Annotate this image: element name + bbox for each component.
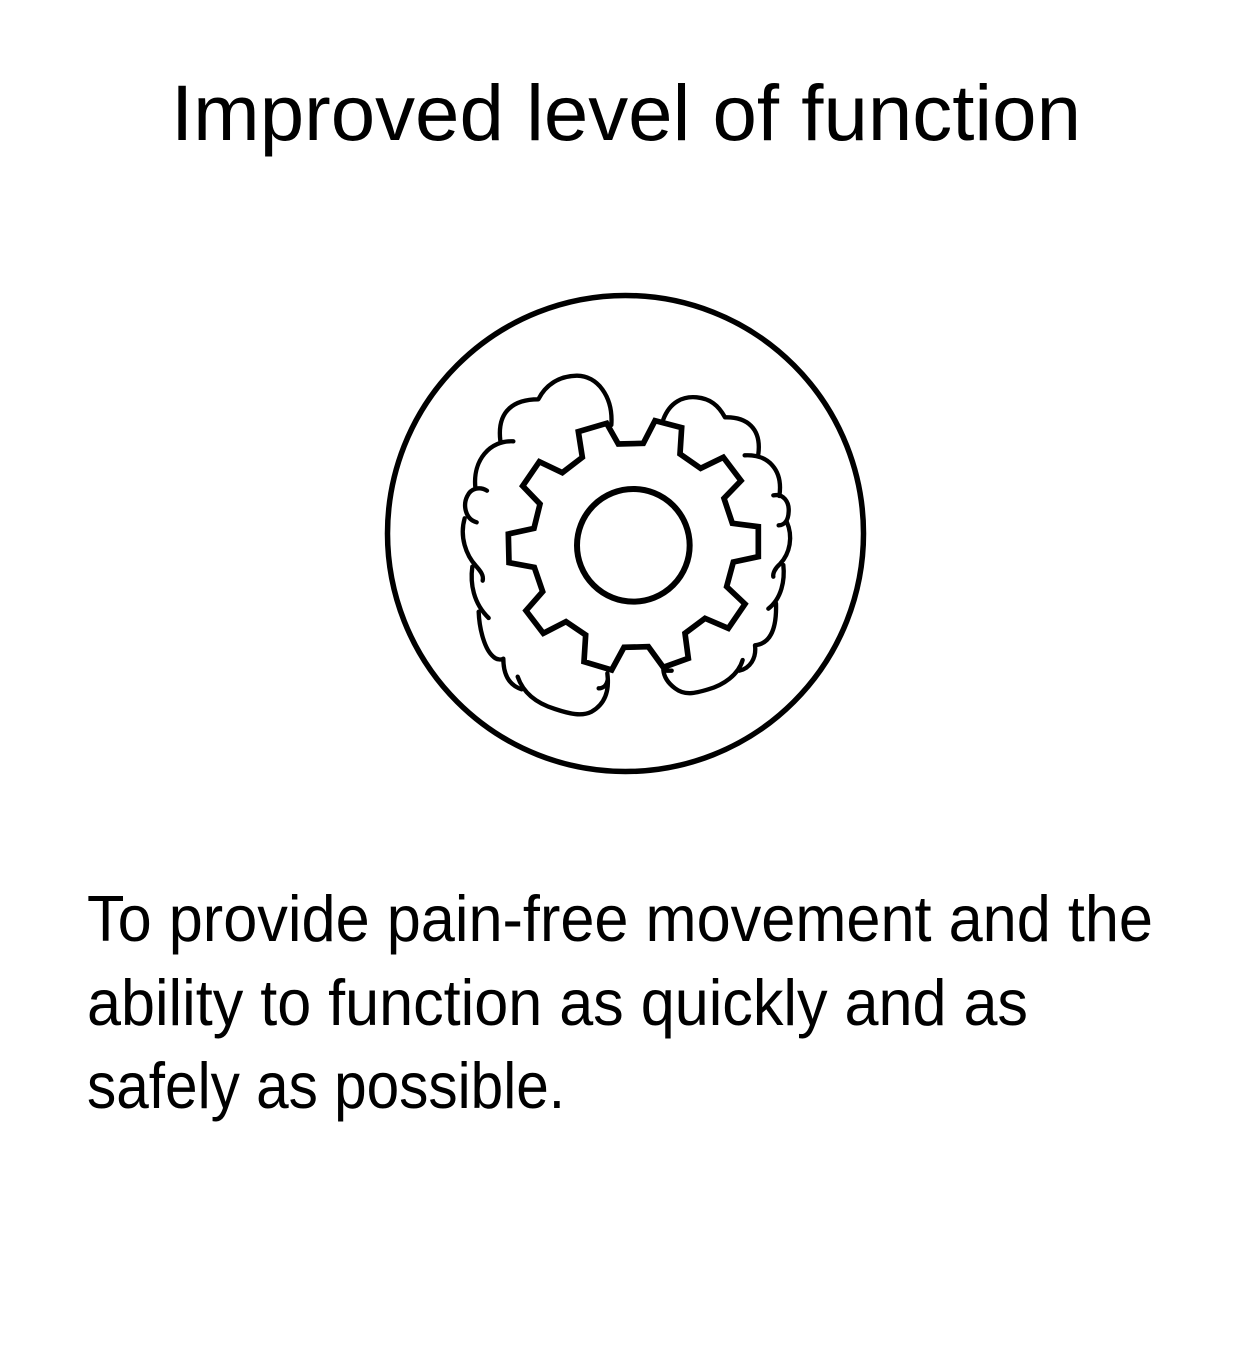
icon: gear centre hole	[577, 489, 690, 602]
body text: ability to function as quickly and as	[87, 966, 1028, 1039]
body text	[87, 882, 1153, 1122]
icon: left brain hemisphere	[463, 376, 612, 714]
icon: right brain hemisphere	[663, 397, 790, 693]
body text: To provide pain-free movement and the	[87, 882, 1153, 955]
icon: brain with gear in circle	[388, 296, 864, 772]
title: Improved level of function	[171, 68, 1081, 157]
body text: safely as possible.	[87, 1049, 565, 1122]
icon: outer circle	[388, 296, 864, 772]
icon: brain and gear drawing	[463, 376, 790, 714]
icon: gear	[508, 421, 758, 670]
